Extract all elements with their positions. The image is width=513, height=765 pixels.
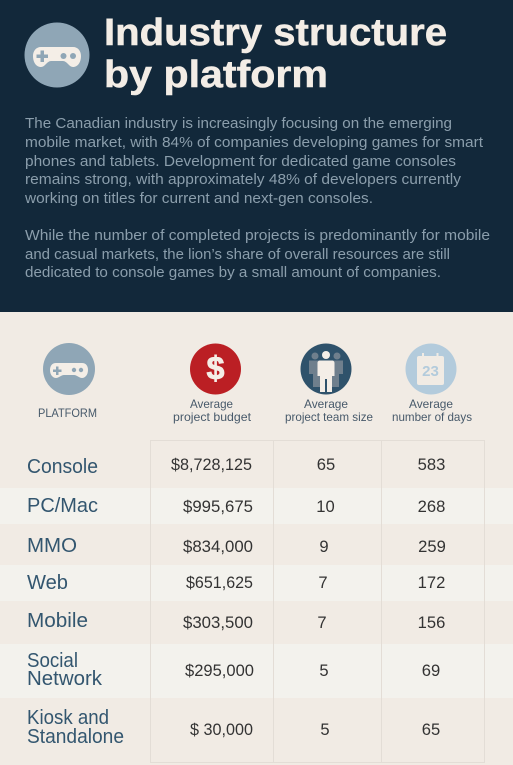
icon: dollar sign: $ (207, 350, 225, 386)
row: Mobile: 7 (317, 613, 327, 632)
column header: average number of days (392, 344, 472, 424)
row: Social Network (27, 649, 440, 690)
row: Social Network: Network (27, 667, 103, 690)
label: average number of days (392, 397, 472, 424)
title: by platform (104, 54, 328, 96)
icon: calendar: 23 (422, 363, 439, 380)
title: Industry structure (104, 12, 447, 54)
row: Mobile: $303,500 (183, 613, 253, 632)
row: MMO: $834,000 (183, 537, 253, 556)
label: average project budget: Average (190, 397, 233, 411)
row: Console: Console (27, 455, 98, 478)
text block: intro paragraph: The Canadian industry is increasingly focusing on the emerging (25, 115, 452, 132)
row: Kiosk and Standalone: Standalone (27, 725, 124, 748)
table row stripes (0, 488, 513, 698)
row: MMO: MMO (27, 534, 77, 557)
text block: intro paragraph: remains strong, with approximately 48% of developers currently (25, 171, 461, 188)
row: Social Network: Social (27, 649, 78, 672)
text block: second paragraph: and casual markets, the lion’s share of overall resources are still (25, 246, 450, 263)
label: average project team size (285, 397, 373, 424)
row: Kiosk and Standalone: 65 (422, 720, 440, 739)
row: Social Network: $295,000 (185, 661, 254, 680)
row: PC/Mac: 268 (418, 497, 445, 516)
text block: intro paragraph (24, 115, 484, 207)
icon: team of people (300, 344, 352, 394)
row: Kiosk and Standalone: 5 (320, 720, 330, 739)
row: MMO: 259 (418, 537, 446, 556)
text block: intro paragraph: mobile market, with 84% of companies developing games for smart (25, 134, 484, 151)
row: Mobile: Mobile (27, 609, 88, 632)
column header: average project team size (285, 344, 373, 424)
label: average number of days: number of days (392, 410, 472, 424)
row: Kiosk and Standalone: $ 30,000 (190, 720, 253, 739)
label: average project team size: project team size (285, 410, 373, 424)
row: Mobile (27, 609, 445, 632)
row: Social Network: 5 (319, 661, 329, 680)
row: Kiosk and Standalone: Kiosk and (27, 706, 109, 729)
text block: intro paragraph: phones and tablets. Development for dedicated game consoles (25, 153, 456, 170)
row: Mobile: 156 (418, 613, 445, 632)
row: Social Network: 69 (422, 661, 440, 680)
row: MMO (27, 534, 446, 557)
text block: intro paragraph: working on titles for current and next-gen consoles. (24, 190, 373, 207)
table grid (150, 440, 484, 762)
row: Console: 65 (317, 455, 335, 474)
row: PC/Mac (27, 494, 445, 517)
row: Web (27, 571, 445, 594)
row: PC/Mac: $995,675 (183, 497, 253, 516)
title (104, 12, 447, 96)
row: MMO: 9 (319, 537, 329, 556)
column header: platform (38, 343, 97, 420)
row: Web: 7 (318, 573, 328, 592)
text block: second paragraph: dedicated to console games by a small amount of companies. (25, 264, 441, 281)
label: platform: PLATFORM (38, 406, 97, 420)
column header: average project budget (173, 344, 252, 424)
row: Console: 583 (418, 455, 445, 474)
label: average number of days: Average (409, 397, 453, 411)
row: Web: 172 (418, 573, 445, 592)
label: average project team size: Average (304, 397, 348, 411)
row: Kiosk and Standalone (27, 706, 440, 748)
row: Web: $651,625 (186, 573, 253, 592)
label: average project budget (173, 397, 252, 424)
row: Console (27, 455, 445, 478)
row: PC/Mac: 10 (316, 497, 335, 516)
label: average project budget: project budget (173, 410, 252, 424)
icon: game controller (43, 343, 95, 395)
row: Web: Web (27, 571, 68, 594)
text block: second paragraph: While the number of completed projects is predominantly for mobile (25, 227, 490, 244)
row: Console: $8,728,125 (171, 455, 252, 474)
row: PC/Mac: PC/Mac (27, 494, 98, 517)
text block: second paragraph (25, 227, 490, 281)
icon: game controller (24, 22, 90, 88)
panel: header (0, 0, 513, 312)
